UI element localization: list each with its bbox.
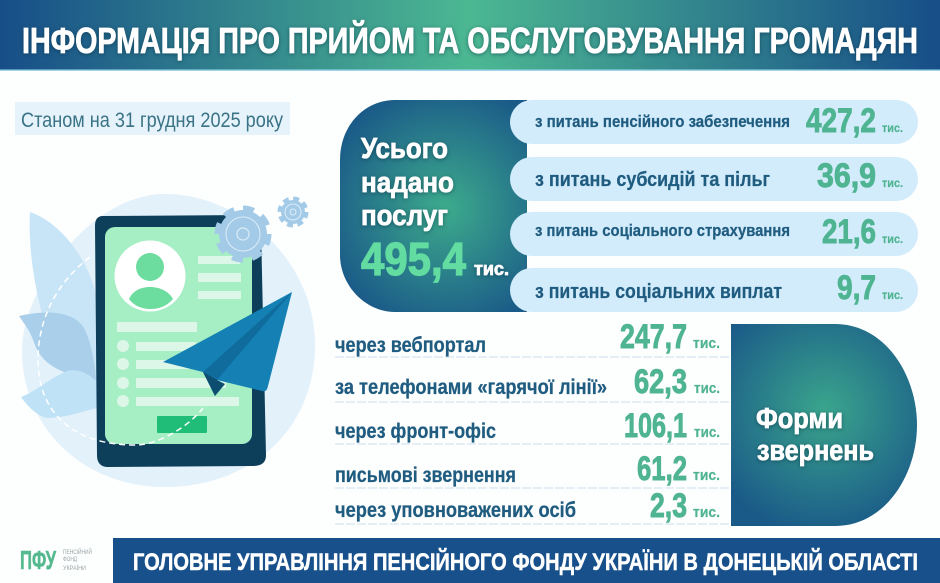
date label [15,102,290,135]
row: front office: 106,1 [624,407,687,445]
total value: 495,4 [361,233,466,285]
header band [0,0,940,71]
row: subsidies: тис. [882,176,903,190]
row: pension: тис. [882,121,903,135]
logo: ФОНД [63,557,77,563]
phone screen [105,227,252,444]
row: written requests: 61,2 [637,450,687,488]
row: social insurance [510,212,918,256]
row: web portal: тис. [693,335,720,352]
dashed path [38,257,203,445]
row: authorised persons: тис. [693,504,720,521]
row: written requests: тис. [693,467,720,484]
button [157,416,207,433]
row: web portal: через вебпортал [335,334,486,357]
row: written requests [335,450,720,488]
panel: forms of requests: Форми [756,403,843,435]
icon: gears [218,198,306,260]
icon: leaves [19,212,97,418]
row: hotline [335,363,720,401]
row: web portal: 247,7 [620,318,687,356]
row: pension: 427,2 [806,102,876,140]
logo: ПЕНСІЙНИЙ [63,548,92,556]
row: social insurance: тис. [882,232,903,246]
row: social payments: тис. [882,288,903,302]
row: social payments: 9,7 [837,269,876,307]
total heading: Усього [361,133,448,165]
logo: УКРАЇНИ [63,565,86,572]
screen lines [117,256,241,407]
row: pension: з питань пенсійного забезпечення [535,112,790,131]
panel: forms of requests [731,324,917,526]
row: hotline: за телефонами «гарячої лінії» [335,376,607,399]
icon: phone body [95,215,266,467]
total value: тис. [474,259,509,279]
row: front office [335,407,720,445]
logo: ПФУ [20,545,57,575]
footer band [113,538,940,583]
total heading: надано [361,167,454,199]
row: authorised persons: через уповноважених осіб [335,499,576,522]
row: pension [510,100,918,144]
row: subsidies: 36,9 [817,157,876,195]
row: social insurance: 21,6 [822,213,876,251]
panel: total services [340,100,527,312]
panel: forms of requests: звернень [757,435,874,467]
row: subsidies [510,157,918,201]
icon: paper plane [163,292,292,396]
icon: avatar [114,240,186,312]
illustration: phone with paper plane [19,194,315,487]
row: social payments [510,268,918,312]
total heading [361,133,454,232]
row: front office: тис. [694,424,720,441]
row: hotline: тис. [694,380,720,397]
row: authorised persons: 2,3 [650,487,687,525]
row: social insurance: з питань соціального страхування [535,221,790,240]
row: hotline: 62,3 [634,363,687,401]
row: front office: через фронт-офіс [335,420,496,443]
row: social payments: з питань соціальних виплат [535,281,782,303]
row: web portal [335,318,720,357]
row: authorised persons [335,487,720,525]
total heading: послуг [361,200,448,232]
row: subsidies: з питань субсидій та пільг [535,169,770,191]
background blob [22,194,315,487]
date label: Станом на 31 грудня 2025 року [21,109,283,132]
row: written requests: письмові звернення [335,464,516,487]
